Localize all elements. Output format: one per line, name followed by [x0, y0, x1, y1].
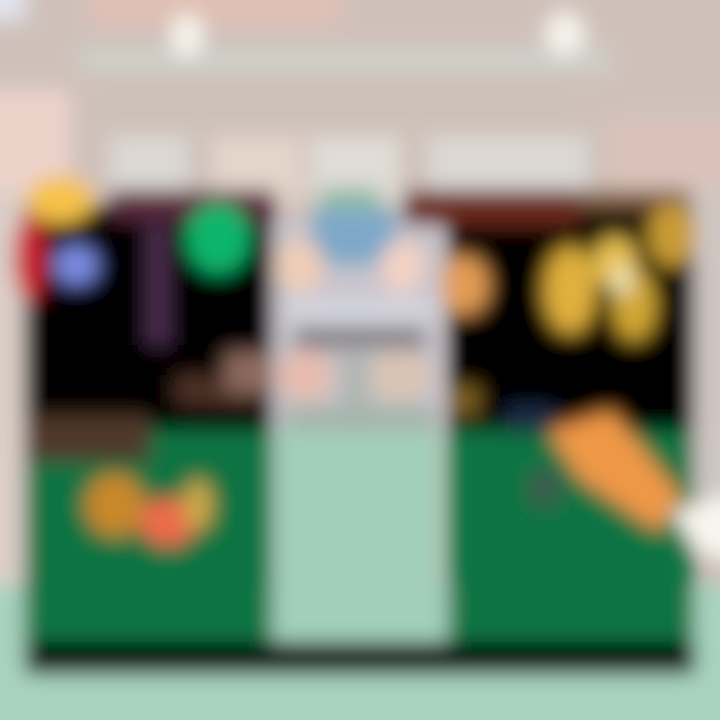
panel: right — [405, 190, 694, 642]
heading: main title line — [110, 136, 588, 202]
background: header wash — [0, 0, 720, 200]
icon: balloons — [14, 176, 98, 302]
heading: first title line — [80, 48, 610, 116]
icon: fruit — [85, 473, 213, 546]
background: lower page — [0, 190, 720, 720]
icon: top left highlight — [170, 14, 204, 58]
icon: top right highlight — [545, 12, 585, 56]
icon: orange carrot — [530, 410, 720, 570]
panel: left — [24, 190, 275, 642]
icon: green circle — [186, 202, 250, 274]
panel: bottom dark strip — [25, 642, 695, 674]
panel: centre — [274, 188, 442, 635]
icon: gold star shape — [544, 203, 696, 341]
